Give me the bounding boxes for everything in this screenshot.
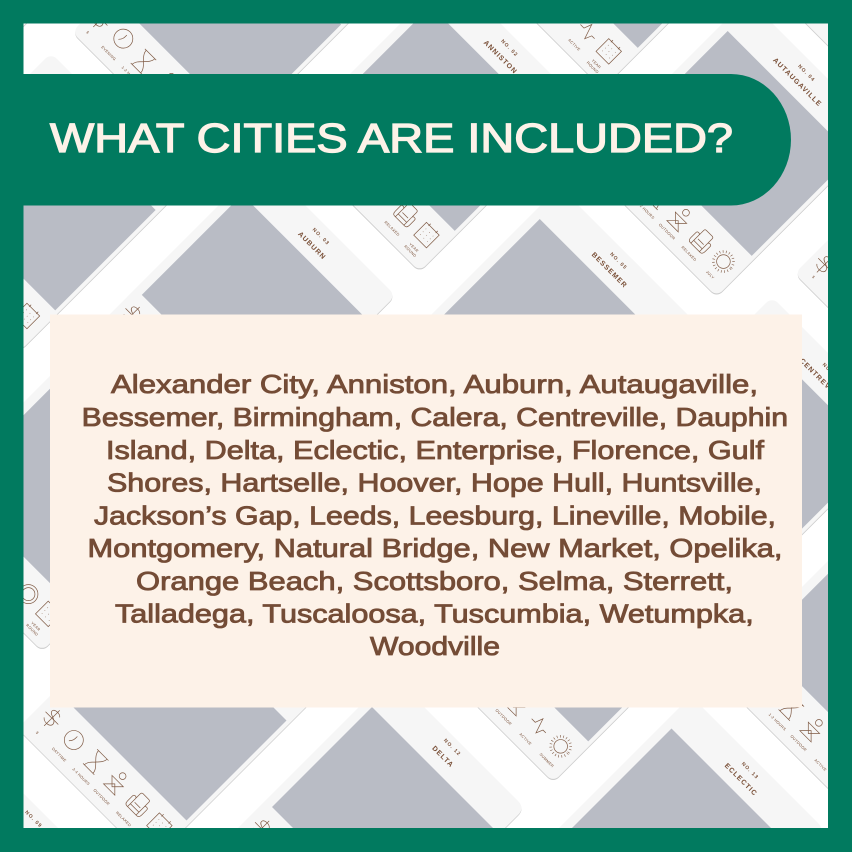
- card: Autaugaville: JULY: [705, 270, 715, 280]
- card: Eclectic: [542, 696, 821, 845]
- card: Autaugaville: [582, 0, 852, 298]
- card: Centreville: NO. 08: [821, 362, 841, 382]
- card: left edge with ring and calendar icons: YEAR: [30, 621, 41, 632]
- card: Eclectic: ECLECTIC: [723, 762, 758, 798]
- card: bottom right with person icon: 1-2 HOURS: [768, 713, 787, 732]
- card: top left with clock and hourglass icons: EVENING: [100, 45, 117, 62]
- card: Autaugaville: 1-2 HOURS: [636, 201, 655, 220]
- card: Delta: DELTA: [430, 745, 455, 769]
- card: Anniston: [285, 0, 585, 273]
- card: Anniston: RELAXED: [383, 220, 400, 237]
- card: Auburn: NO. 03: [311, 227, 331, 247]
- card: Anniston: ANNISTON: [482, 39, 518, 76]
- card: bottom right with person icon: [714, 510, 852, 809]
- card: top with active and calendar icons: YEAR: [591, 59, 602, 70]
- card: Anniston: YEAR: [408, 242, 419, 253]
- text block: cities: Montgomery, Natural Bridge, New Market, Opelika,: [88, 533, 782, 563]
- card: top left with clock and hourglass icons: [71, 0, 371, 167]
- card: Auburn: [97, 162, 396, 461]
- card: Bessemer: BESSEMER: [590, 251, 628, 290]
- card: right edge with dollar icon: [794, 109, 852, 408]
- card: Autaugaville: OUTDOOR: [658, 223, 676, 241]
- card: Delta: [227, 674, 522, 846]
- card: below panel with summer sun icon: OUTDOOR: [494, 708, 512, 726]
- card: corner sliver top left: [0, 0, 75, 140]
- card: below panel with summer sun icon: SUMMER: [539, 752, 555, 769]
- card: Autaugaville: AUTAUGAVILLE: [771, 57, 823, 108]
- card: bottom left with six icons: DAYTIME: [51, 747, 67, 763]
- card: bottom left corner: [0, 770, 75, 845]
- card: Autaugaville: NO. 04: [796, 64, 816, 83]
- card: bottom right with person icon: ACTIVE: [813, 758, 827, 772]
- card: left edge with ring and calendar icons: [0, 353, 207, 652]
- card: top with active and calendar icons: [468, 0, 768, 90]
- card: top left with clock and hourglass icons: 1-2 HOURS: [121, 65, 140, 85]
- card: bottom left with six icons: [18, 564, 316, 846]
- card: top left with clock and hourglass icons: $: [85, 30, 90, 35]
- text block: cities: Orange Beach, Scottsboro, Selma, Sterrett,: [136, 566, 733, 596]
- panel: city list: [50, 314, 802, 708]
- card: Centreville: [607, 297, 852, 596]
- card: bottom left with six icons: 2-4 HOURS: [71, 767, 91, 786]
- text block: cities: Woodville: [370, 631, 500, 661]
- card: right edge with dollar icon: $: [811, 275, 816, 280]
- card: Bessemer: NO. 05: [608, 252, 628, 271]
- card: Anniston: ROUND: [403, 245, 417, 258]
- card: below panel with summer sun icon: [419, 484, 718, 783]
- text block: cities: Alexander City, Anniston, Auburn, Autaugaville,: [111, 369, 758, 399]
- text block: cities: Shores, Hartselle, Hoover, Hope Hull, Huntsville,: [107, 468, 762, 498]
- card: bottom left with six icons: $: [35, 731, 40, 736]
- card: left edge with ring and calendar icons: ROUND: [25, 623, 39, 637]
- card: bottom left with six icons: RELAXED: [115, 811, 132, 828]
- card: top with active and calendar icons: ACTIVE: [567, 38, 581, 52]
- card: Centreville: CENTREVILLE: [798, 358, 845, 405]
- card: bottom left with six icons: OUTDOOR: [92, 788, 110, 806]
- card: Autaugaville: RELAXED: [680, 245, 697, 262]
- card: Anniston: NO. 02: [499, 39, 519, 58]
- title banner: [20, 74, 791, 206]
- card: bottom left corner: NO. 09: [23, 810, 43, 829]
- text block: cities: Bessemer, Birmingham, Calera, Centreville, Dauphin: [82, 402, 788, 432]
- card: Eclectic: NO. 13: [740, 761, 760, 781]
- card: below panel with summer sun icon: ACTIVE: [518, 732, 532, 746]
- text block: cities: Talladega, Tuscaloosa, Tuscumbia, Wetumpka,: [115, 599, 754, 629]
- title: WHAT CITIES ARE INCLUDED?: [50, 115, 733, 161]
- card: top with active and calendar icons: ROUND: [586, 61, 599, 75]
- card: top right sliver: [764, 0, 852, 116]
- card: Delta: NO. 12: [442, 738, 462, 758]
- text block: cities: Jackson’s Gap, Leeds, Leesburg, Lineville, Mobile,: [94, 500, 776, 530]
- card: Bessemer: [394, 186, 694, 486]
- card: left under banner with calendar icon: [0, 53, 185, 352]
- text block: cities: [82, 369, 788, 661]
- text block: cities: Island, Delta, Eclectic, Enterprise, Florence, Gulf: [106, 435, 765, 465]
- card: Auburn: AUBURN: [296, 231, 327, 261]
- card: bottom right with person icon: OUTDOOR: [789, 734, 807, 752]
